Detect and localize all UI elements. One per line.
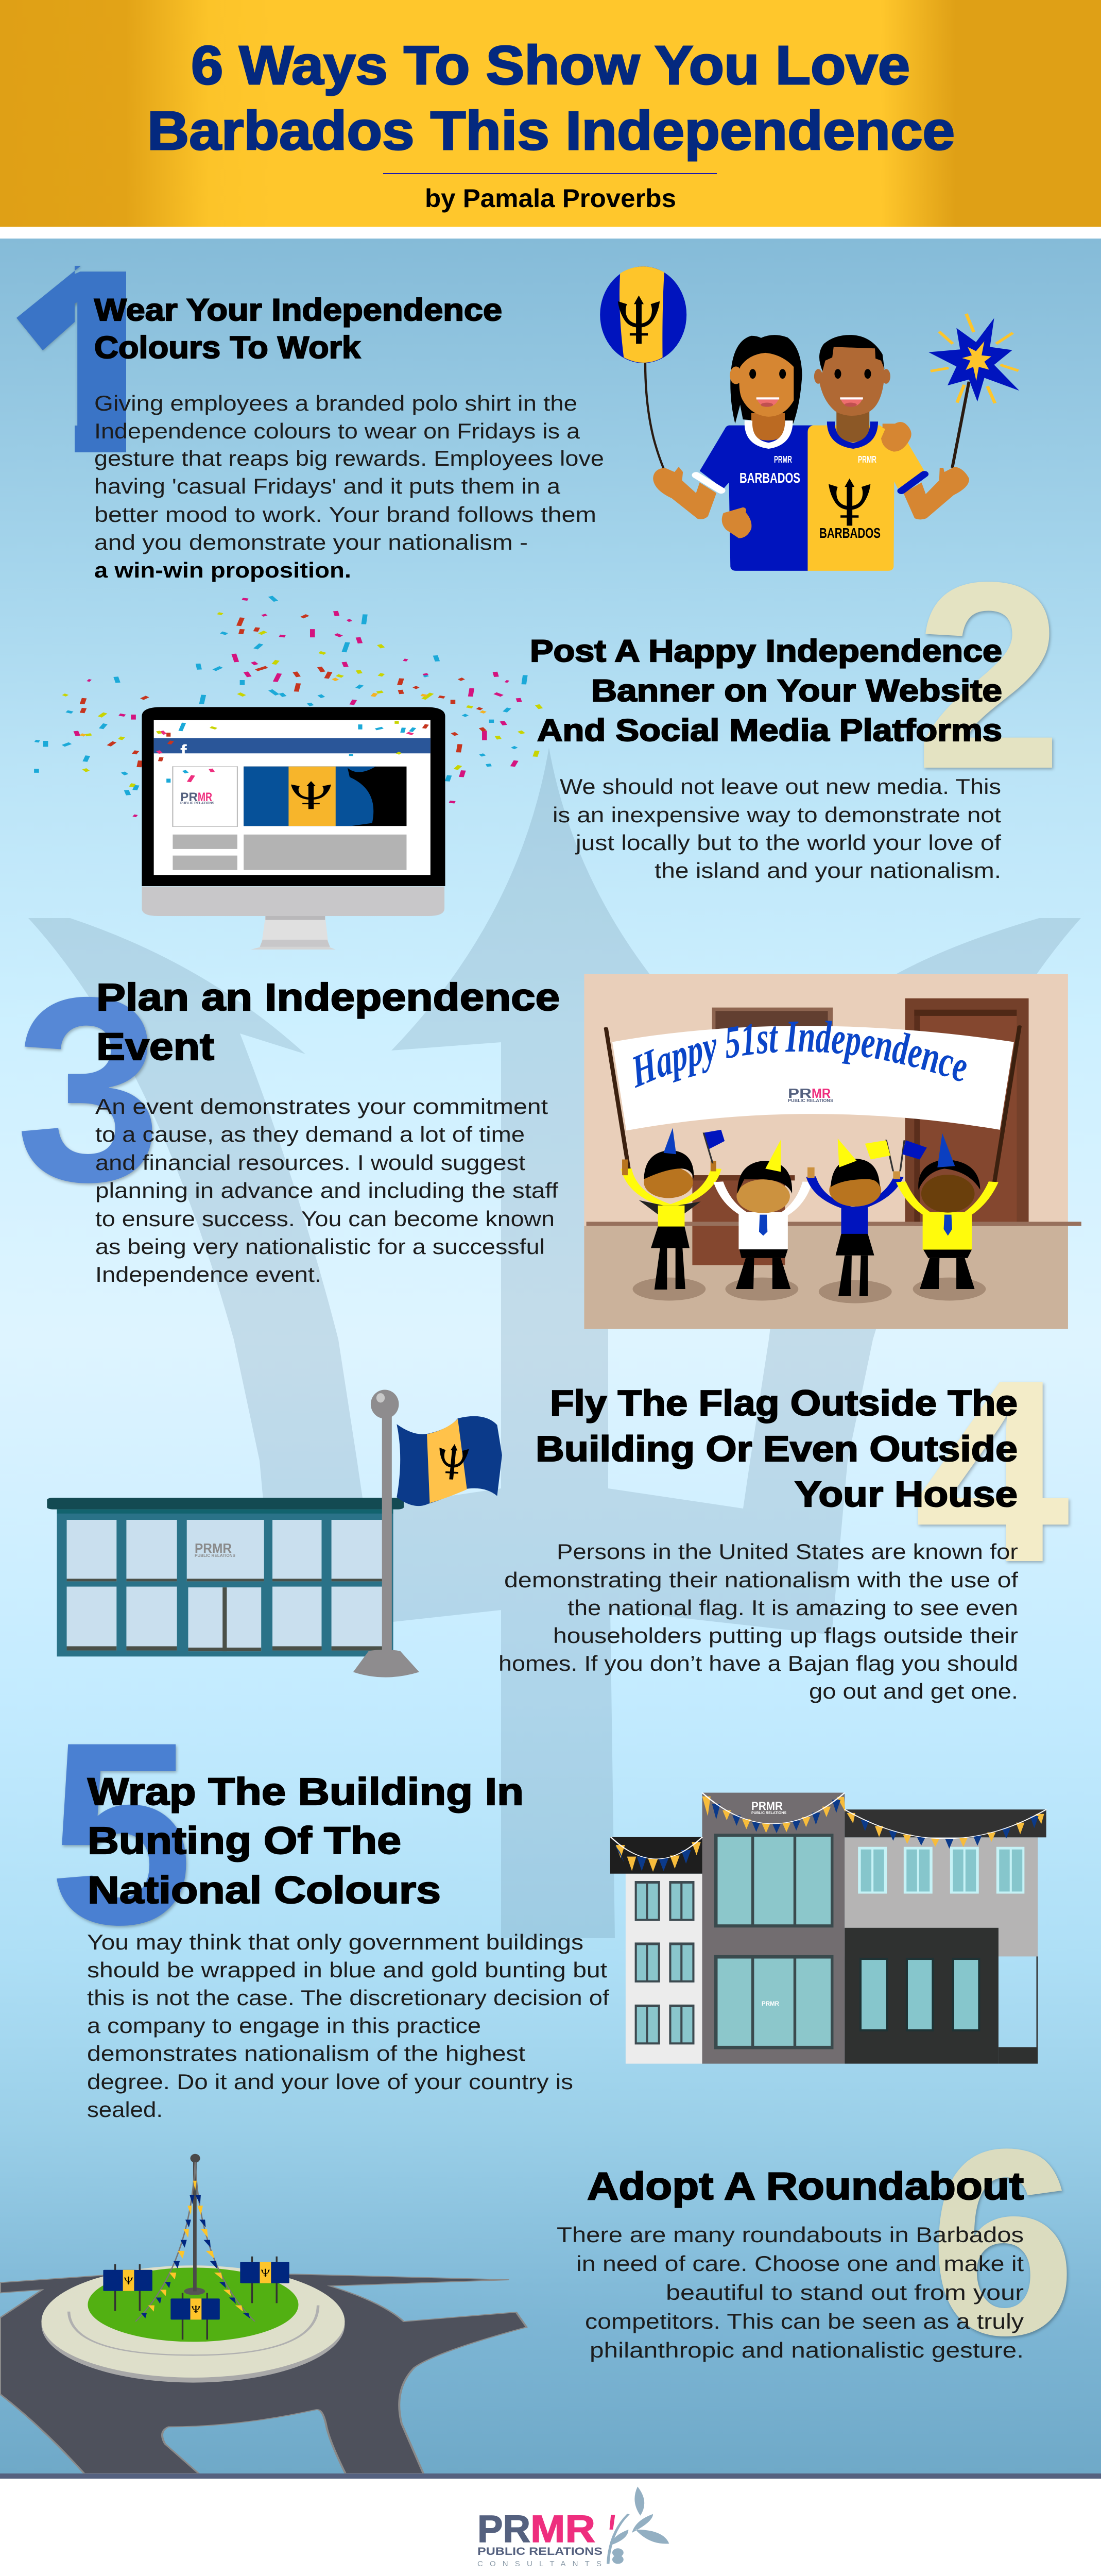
illustration: desktop monitor with social media page bbox=[142, 707, 445, 950]
heading 4: Building Or Even Outside bbox=[536, 1429, 1018, 1469]
body 4: the national flag. It is amazing to see even bbox=[567, 1596, 1018, 1620]
illustration: roundabout bbox=[0, 2154, 527, 2473]
banner bbox=[606, 1026, 1020, 1183]
header banner bbox=[0, 0, 1101, 227]
banner lettering: Happy 51st Independence bbox=[632, 1021, 967, 1088]
shirt labels: BARBADOS bbox=[819, 525, 881, 541]
facebook bar bbox=[154, 738, 431, 753]
icon: sparkler bbox=[928, 314, 1019, 468]
section 6 text bbox=[557, 2164, 1024, 2362]
flags on posts bbox=[103, 2257, 289, 2340]
heading 2: Banner on Your Website bbox=[591, 673, 1002, 708]
heading 4: Your House bbox=[795, 1474, 1018, 1514]
title: 6 Ways To Show You Love bbox=[191, 35, 910, 96]
body 6: philanthropic and nationalistic gesture. bbox=[590, 2338, 1024, 2362]
body 1: having 'casual Fridays' and it puts them in a bbox=[94, 474, 561, 498]
heading 5: National Colours bbox=[88, 1869, 441, 1911]
right building bbox=[845, 1809, 1046, 2064]
heading 3: Plan an Independence bbox=[96, 976, 560, 1019]
body 3: to a cause, as they demand a lot of time bbox=[95, 1122, 525, 1146]
bunting bbox=[611, 1793, 1046, 1872]
window logo: PUBLIC RELATIONS bbox=[195, 1553, 236, 1558]
heading 4 bbox=[536, 1383, 1018, 1514]
banner logo bbox=[788, 1086, 834, 1103]
facebook f: f bbox=[180, 741, 187, 763]
left building bbox=[610, 1837, 702, 2064]
building logos: PRMR bbox=[762, 2000, 779, 2007]
monitor logo: PR bbox=[180, 790, 198, 804]
body 1: better mood to work. Your brand follows them bbox=[94, 502, 596, 527]
heading 1: Colours To Work bbox=[94, 330, 361, 365]
body 6: There are many roundabouts in Barbados bbox=[557, 2223, 1024, 2247]
body 4: go out and get one. bbox=[809, 1679, 1018, 1703]
waving flag bbox=[397, 1416, 502, 1506]
flag image bbox=[244, 767, 406, 826]
hands bbox=[722, 422, 911, 538]
numeral 5: 5 bbox=[49, 1688, 193, 1979]
body 6: beautiful to stand out from your bbox=[666, 2280, 1024, 2304]
building logos: PUBLIC RELATIONS bbox=[751, 1811, 786, 1815]
heading 4: Fly The Flag Outside The bbox=[550, 1383, 1018, 1423]
body 4: householders putting up flags outside their bbox=[553, 1623, 1018, 1648]
monitor logo: MR bbox=[198, 790, 212, 804]
building logos: PRMR bbox=[751, 1800, 783, 1812]
heading 5: Bunting Of The bbox=[88, 1819, 401, 1862]
numeral 1 bbox=[16, 266, 126, 452]
body 2: the island and your nationalism. bbox=[655, 858, 1001, 883]
placeholder blocks bbox=[173, 835, 406, 870]
footer logo: CONSULTANTS bbox=[477, 2560, 601, 2568]
arms bbox=[653, 467, 969, 519]
room bbox=[584, 974, 1081, 1329]
body 3: to ensure success. You can become known bbox=[95, 1207, 555, 1231]
body 3 bbox=[95, 1094, 558, 1286]
window logo: PRMR bbox=[195, 1540, 232, 1556]
confetti over screen bbox=[158, 721, 427, 783]
byline: by Pamala Proverbs bbox=[425, 184, 676, 213]
numeral 4: 4 bbox=[914, 1326, 1072, 1617]
illustration: buildings wrapped in bunting bbox=[610, 1793, 1046, 2064]
body 2 bbox=[553, 774, 1001, 883]
shirt labels: PRMR bbox=[858, 454, 876, 465]
person 3 bbox=[807, 1139, 900, 1296]
floor shadows bbox=[633, 1278, 986, 1303]
icon: flag balloon bbox=[600, 266, 686, 478]
logo box bbox=[173, 767, 237, 826]
section 1 text bbox=[94, 293, 604, 582]
illustration: building with flagpole bbox=[47, 1389, 502, 1677]
island bbox=[41, 2265, 345, 2383]
section 5 text bbox=[87, 1770, 609, 2122]
man figure bbox=[814, 335, 890, 446]
person 2 bbox=[718, 1140, 807, 1289]
body 1: gesture that reaps big rewards. Employees love bbox=[94, 446, 604, 470]
building bbox=[47, 1498, 404, 1656]
heading 2: And Social Media Platforms bbox=[537, 713, 1002, 748]
body 6: competitors. This can be seen as a truly bbox=[585, 2309, 1024, 2333]
centre pole with bunting bbox=[135, 2154, 255, 2321]
body 4: demonstrating their nationalism with the use of bbox=[504, 1568, 1018, 1592]
body 5: degree. Do it and your love of your country is bbox=[87, 2070, 573, 2094]
illustration: staff with independence banner bbox=[584, 974, 1081, 1329]
body 5: sealed. bbox=[87, 2097, 163, 2122]
footer logo: PR bbox=[477, 2507, 530, 2550]
body 1: Independence colours to wear on Fridays is a bbox=[94, 419, 580, 443]
body 3: Independence event. bbox=[95, 1262, 321, 1286]
banner logo: PR bbox=[788, 1086, 812, 1101]
body 3: An event demonstrates your commitment bbox=[95, 1094, 548, 1118]
heading 2: Post A Happy Independence bbox=[530, 634, 1002, 668]
body 1: a win-win proposition. bbox=[94, 558, 351, 582]
heading 6: Adopt A Roundabout bbox=[587, 2164, 1024, 2208]
illustration: couple in independence shirts with balloon and sparkler bbox=[600, 266, 1019, 571]
section 3 text bbox=[95, 976, 560, 1286]
section 2 text bbox=[530, 634, 1002, 883]
body 3: planning in advance and including the staff bbox=[95, 1178, 558, 1202]
body 5: this is not the case. The discretionary decision of bbox=[87, 1986, 609, 2010]
background trident watermark bbox=[28, 748, 1081, 1938]
heading 5: Wrap The Building In bbox=[88, 1770, 524, 1813]
banner logo: PUBLIC RELATIONS bbox=[788, 1098, 834, 1103]
body 2: We should not leave out new media. This bbox=[560, 774, 1001, 799]
footer logo: PUBLIC RELATIONS bbox=[477, 2546, 603, 2557]
numeral 2: 2 bbox=[915, 527, 1063, 824]
hand flags bbox=[703, 1130, 927, 1171]
heading 1: Wear Your Independence bbox=[94, 293, 502, 327]
body 5: You may think that only government buildings bbox=[87, 1930, 583, 1954]
numeral 3: 3 bbox=[15, 943, 162, 1236]
footer logo: MR bbox=[530, 2507, 595, 2550]
body 1 bbox=[94, 391, 604, 582]
two-colour shirt bbox=[696, 426, 924, 571]
woman figure bbox=[730, 335, 802, 446]
heading 3: Event bbox=[96, 1025, 214, 1068]
heading 5 bbox=[88, 1770, 524, 1911]
heading 1 bbox=[94, 293, 502, 365]
building logos bbox=[751, 1800, 786, 2007]
section 4 text bbox=[498, 1383, 1018, 1703]
footer bbox=[0, 2473, 1101, 2576]
body 4: homes. If you don’t have a Bajan flag you should bbox=[498, 1651, 1018, 1675]
shirt labels: BARBADOS bbox=[739, 470, 800, 486]
person 1 bbox=[622, 1128, 716, 1290]
body 5 bbox=[87, 1930, 609, 2122]
body 3: as being very nationalistic for a successful bbox=[95, 1234, 545, 1259]
title bbox=[147, 35, 955, 161]
flagpole bbox=[353, 1389, 419, 1677]
person 4 bbox=[901, 1133, 993, 1289]
monitor logo bbox=[180, 790, 214, 805]
shirt labels: PRMR bbox=[774, 454, 792, 465]
centre building bbox=[702, 1793, 845, 2064]
body 2: just locally but to the world your love of bbox=[575, 831, 1001, 855]
monitor logo: PUBLIC RELATIONS bbox=[180, 802, 214, 805]
title: Barbados This Independence bbox=[147, 100, 955, 161]
heading 2 bbox=[530, 634, 1002, 748]
body 2: is an inexpensive way to demonstrate not bbox=[553, 803, 1001, 827]
monitor body bbox=[142, 707, 445, 950]
body 6: in need of care. Choose one and make it bbox=[576, 2251, 1024, 2276]
heading 3 bbox=[96, 976, 560, 1068]
numeral 6: 6 bbox=[929, 2094, 1076, 2391]
body 1: and you demonstrate your nationalism - bbox=[94, 530, 528, 554]
shirt labels bbox=[739, 454, 881, 541]
body 4 bbox=[498, 1539, 1018, 1703]
body 3: and financial resources. I would suggest bbox=[95, 1150, 525, 1175]
body 6 bbox=[557, 2223, 1024, 2362]
banner logo: MR bbox=[812, 1086, 831, 1101]
illustration: confetti behind monitor bbox=[35, 596, 541, 816]
body 4: Persons in the United States are known for bbox=[557, 1539, 1018, 1564]
body 1: Giving employees a branded polo shirt in the bbox=[94, 391, 577, 415]
body 5: a company to engage in this practice bbox=[87, 2013, 481, 2038]
footer logo bbox=[477, 2486, 669, 2568]
body 5: demonstrates nationalism of the highest bbox=[87, 2041, 525, 2065]
body 5: should be wrapped in blue and gold bunting but bbox=[87, 1958, 607, 1982]
road bbox=[0, 2274, 527, 2473]
